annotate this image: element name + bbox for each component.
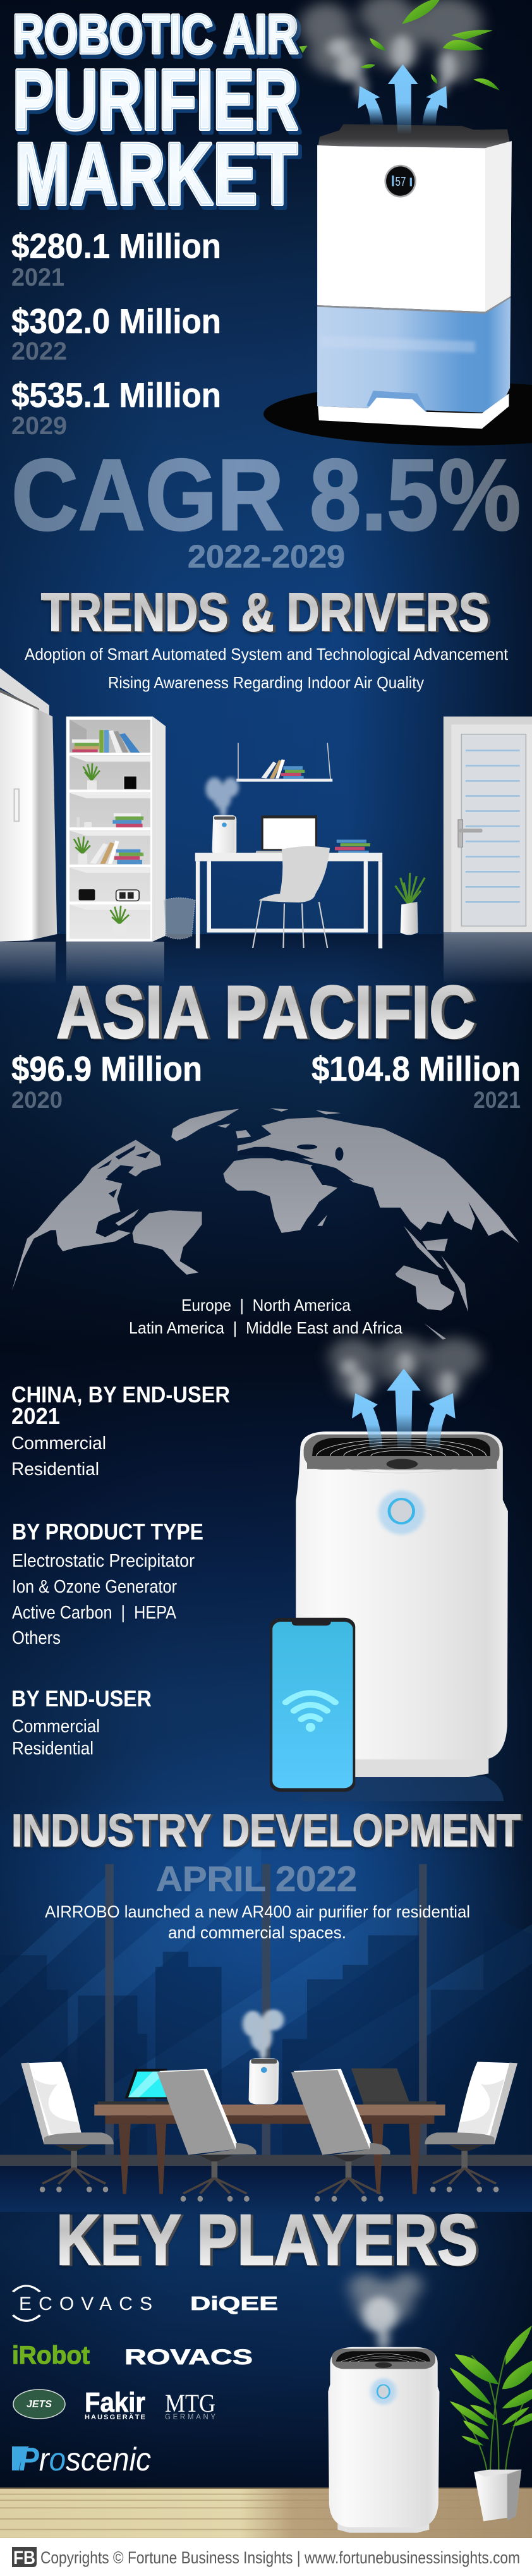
Asia Pacific figures: $96.9 Million [11,1049,202,1088]
leaves [299,0,499,90]
logo: Proscenic: Proscenic [19,2441,151,2478]
logo: MTG: GERMANY [165,2414,215,2421]
logo: Jets [13,2390,65,2419]
potted plant [450,2326,532,2521]
bookshelf [66,717,166,942]
other regions: Latin America | Middle East and Africa [129,1318,403,1337]
by product type: Electrostatic Precipitator [12,1551,195,1571]
world map [12,1109,519,1340]
China by end-user [11,1382,230,1479]
title: MARKET [15,125,298,223]
arrows [352,1369,456,1450]
right chair [425,2062,517,2192]
smoke [329,1336,482,1400]
China by end-user: CHINA, BY END-USER [11,1382,230,1407]
office city backdrop [0,1833,532,2212]
logo: Jets: JETS [27,2399,52,2410]
logo: Fakir: HAUSGERÄTE [85,2413,145,2421]
development text [45,1902,470,1942]
title: ROBOTIC AIR [15,7,301,68]
middle chair two [291,2069,390,2202]
development text: and commercial spaces. [168,1923,346,1942]
left chair [21,2062,114,2192]
title [13,4,301,226]
by product type: Ion & Ozone Generator [12,1577,177,1597]
China by end-user: Residential [11,1459,99,1479]
logo: Rovacs: ROVACS [124,2345,253,2369]
forecast period: 2022-2029 [188,538,345,574]
title: ROBOTIC AIR [13,4,298,65]
hero purifier floor shadow [263,382,532,446]
logo: Ecovacs: ECOVACS [19,2293,152,2314]
laptops [98,2069,436,2105]
date: APRIL 2022 [156,1859,357,1899]
desk laptop [255,815,317,855]
desk [195,853,382,949]
drivers text: Rising Awareness Regarding Indoor Air Quality [108,673,424,692]
market size figures: 2022 [11,337,67,365]
logo: iRobot: iRobot [12,2342,90,2369]
waste bin [164,898,195,939]
window frames [105,1864,427,2155]
market size figures: 2029 [11,412,67,440]
room scene [0,668,532,949]
title: MARKET [16,128,301,226]
by product type: Others [12,1628,61,1648]
market size figures: $280.1 Million [11,226,221,265]
body [300,1777,504,1801]
by product type: Active Carbon | HEPA [12,1603,177,1623]
China by end-user: Commercial [11,1433,106,1454]
market size figures: 2021 [11,264,64,291]
floor plant [396,873,425,935]
by end-user [11,1686,152,1759]
logo: Diqee: DiQEE [190,2292,278,2314]
logo: Fakir: Fakir [85,2387,145,2418]
shelf objects [76,776,139,901]
purifier display reading: 57 [396,175,406,189]
wall shelf [236,743,332,782]
drivers text [25,645,509,692]
other regions: Europe | North America [181,1296,351,1315]
company logos [12,2286,278,2478]
small purifier with smoke [205,777,239,856]
mini purifier [243,2010,284,2105]
development text: AIRROBO launched a new AR400 air purifier for residential [45,1902,470,1921]
title: PURIFIER [13,52,298,147]
second purifier with phone [270,1336,508,1801]
room floor [0,933,532,988]
title: PURIFIER [15,55,301,150]
Asia Pacific figures: 2020 [11,1087,63,1113]
office floor [0,2155,532,2212]
footer [0,2538,532,2576]
title: PURIFIER [13,52,298,147]
market size figures: $535.1 Million [11,375,221,415]
market size figures: $302.0 Million [11,301,221,341]
title: ROBOTIC AIR [13,4,298,65]
middle chair one [157,2069,256,2202]
other regions [129,1296,403,1337]
logo: MTG: MTG [165,2389,215,2417]
desk chair [253,846,330,948]
wooden floor [0,2488,532,2538]
by end-user: BY END-USER [11,1686,152,1711]
third purifier [328,2273,439,2533]
shelf books [72,730,143,864]
by product type: BY PRODUCT TYPE [12,1519,203,1545]
by product type [12,1519,203,1648]
by end-user: Residential [12,1739,94,1759]
title: MARKET [15,125,298,223]
window and curtain [0,668,57,942]
Asia Pacific figures [11,1049,521,1113]
phone [270,1618,355,1792]
table [94,2105,445,2194]
door [444,717,532,933]
market size figures [11,226,221,440]
China by end-user: 2021 [11,1403,60,1429]
desk books [335,840,370,854]
icon: Fortune Business Insights logo: FB [13,2548,35,2568]
heading: Asia Pacific: ASIA PACIFIC [56,971,475,1054]
drivers text: Adoption of Smart Automated System and Technological Advancement [25,645,509,664]
Asia Pacific figures: 2021 [473,1087,521,1113]
hero air purifier [317,124,512,429]
heading: Asia Pacific: ASIA PACIFIC [56,973,475,1057]
logo: Ecovacs [13,2286,152,2321]
by end-user: Commercial [12,1716,100,1737]
Asia Pacific figures: $104.8 Million [311,1049,521,1088]
hero airflow arrows [358,64,447,134]
hero smoke [300,0,482,100]
shelf plants [74,763,129,924]
